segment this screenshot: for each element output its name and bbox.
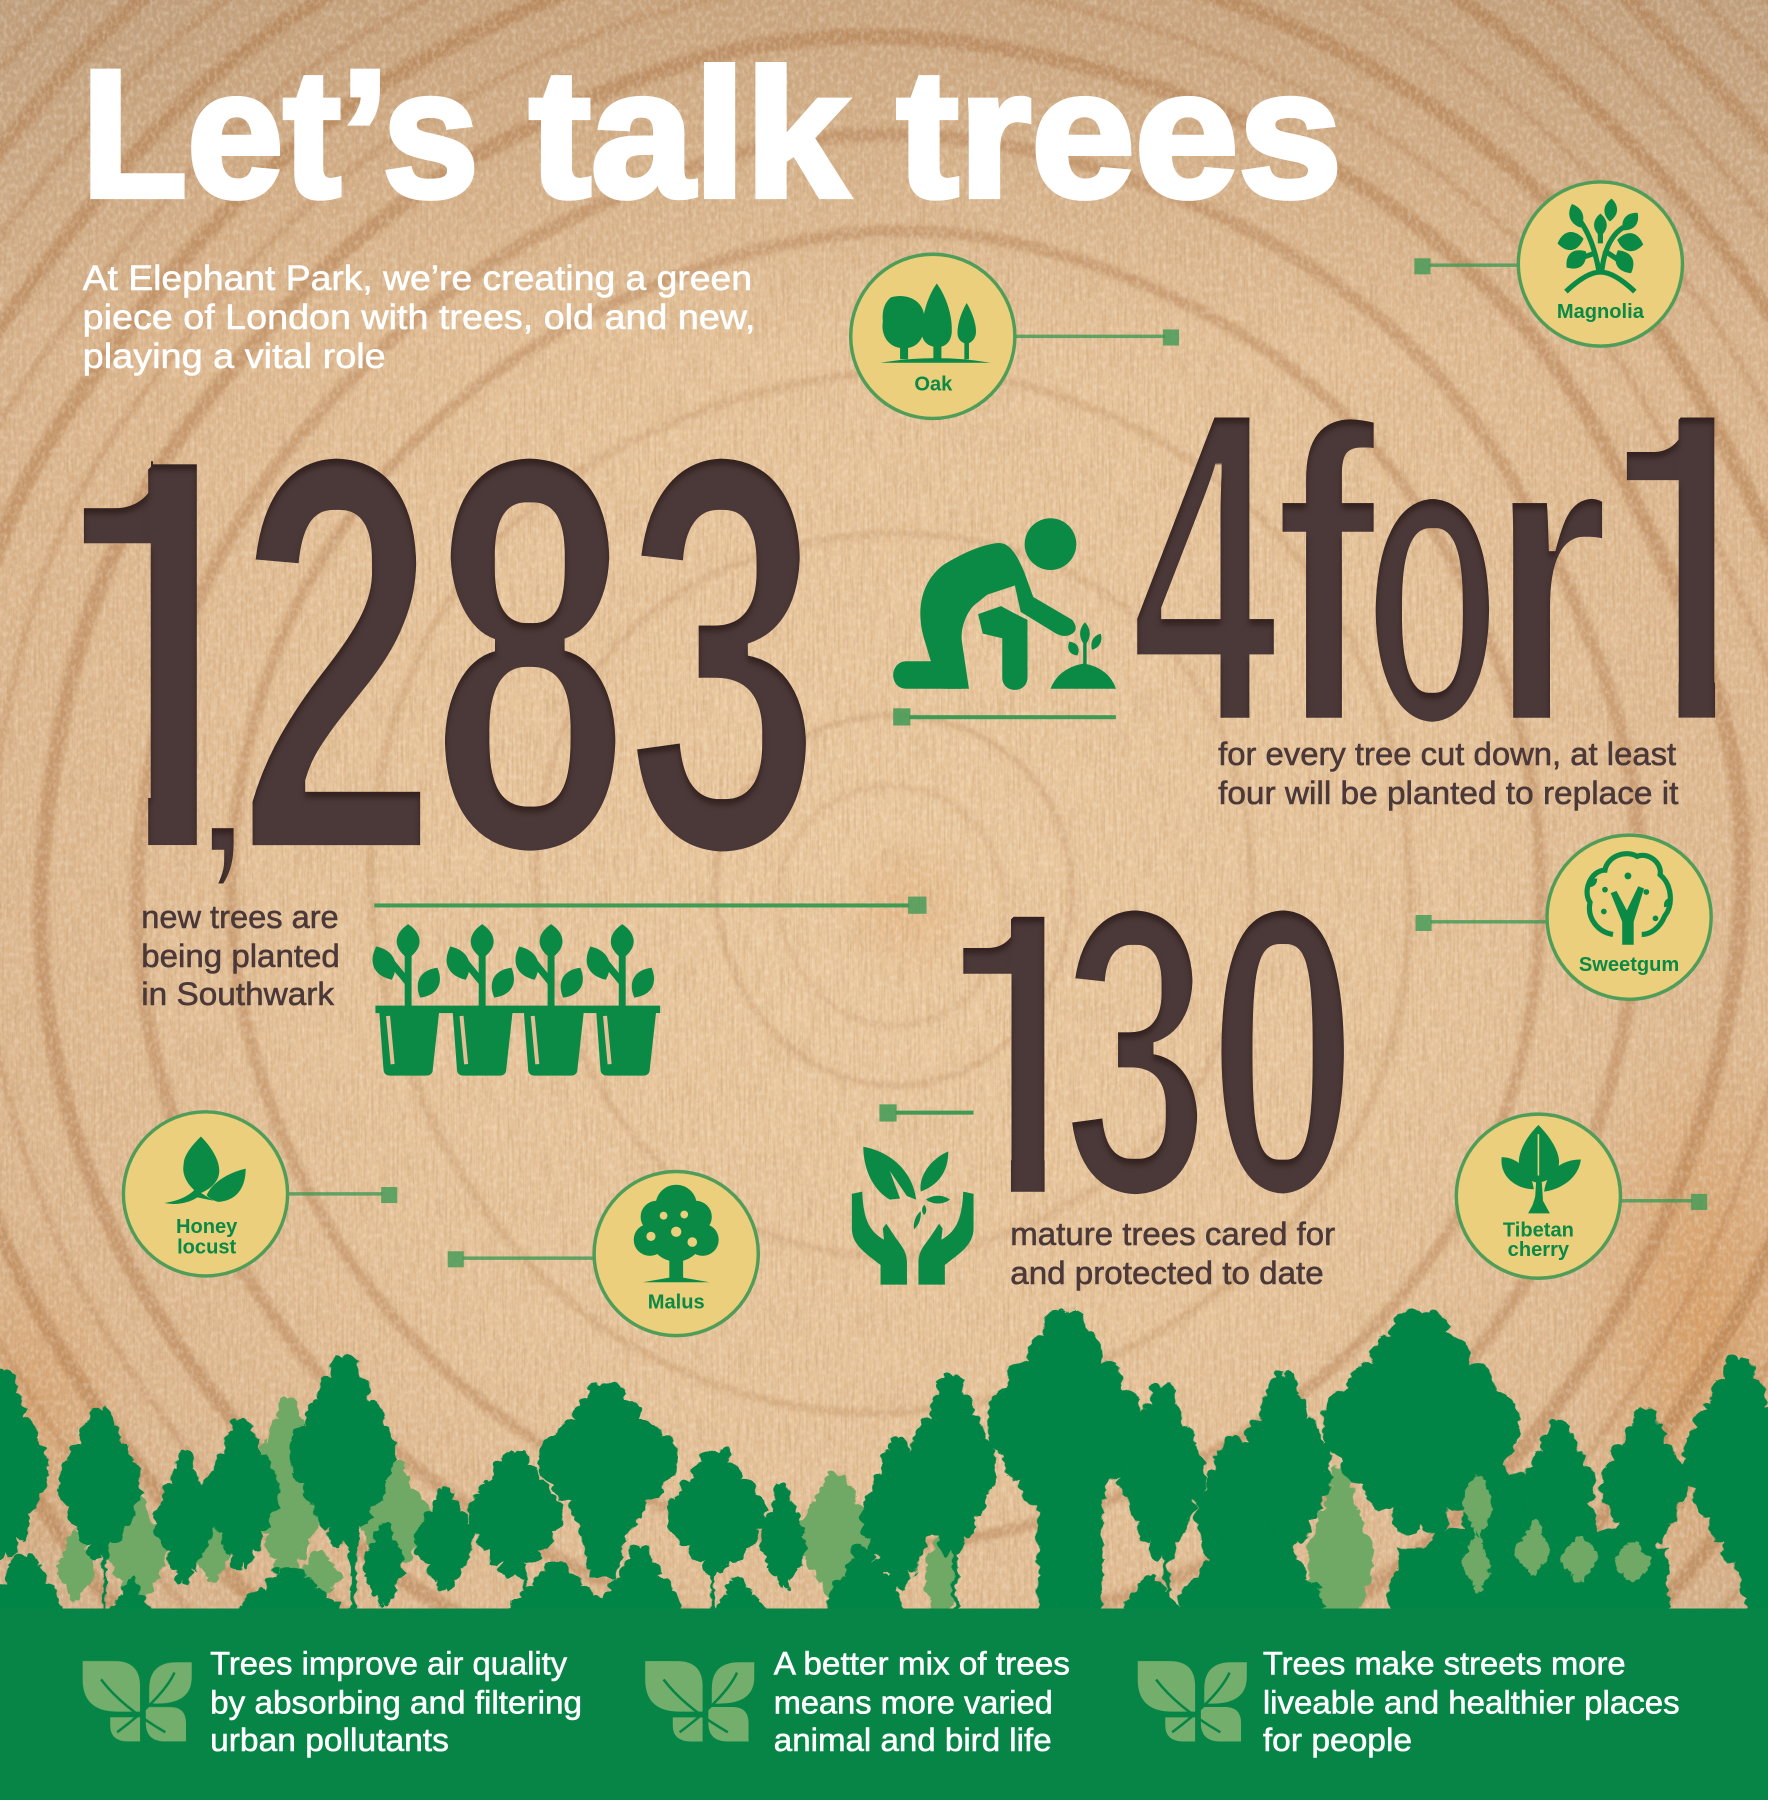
intro text: playing a vital role — [83, 337, 386, 376]
caption: four for one: four will be planted to replace it — [1218, 774, 1678, 811]
fact: air quality: urban pollutants — [210, 1721, 449, 1758]
caption: 130: and protected to date — [1010, 1254, 1324, 1291]
title: Let’s — [82, 33, 479, 235]
big number: 130: 3 — [1062, 819, 1210, 1283]
title — [82, 33, 1342, 235]
big number: 130: 0 — [1208, 820, 1358, 1284]
fact: liveable streets: liveable and healthier places — [1263, 1683, 1680, 1720]
big number: 130 — [963, 910, 1344, 1194]
intro text: piece of London with trees, old and new, — [83, 298, 755, 337]
fact: air quality: Trees improve air quality — [210, 1644, 568, 1681]
species: honey locust: locust — [177, 1237, 237, 1259]
big number: 1,283 — [84, 458, 806, 884]
caption: 130: mature trees cared for — [1010, 1215, 1335, 1252]
intro text — [83, 259, 755, 376]
fact: liveable streets: for people — [1263, 1721, 1412, 1758]
species: oak — [851, 254, 1179, 418]
species: magnolia — [1414, 182, 1682, 346]
species: malus: Malus — [648, 1292, 705, 1314]
fact: animal and bird life: means more varied — [774, 1683, 1053, 1720]
big number: 4 for 1: o — [1364, 338, 1501, 815]
title: trees — [897, 33, 1342, 235]
caption: new trees — [141, 898, 340, 1012]
connector: gardener — [893, 708, 1116, 726]
icon: seedling pots — [366, 924, 660, 1076]
fact: animal and bird life: A better mix of trees — [774, 1644, 1070, 1681]
illustration: pale trees between trunks — [1461, 1472, 1648, 1589]
connector: 130 — [879, 1104, 974, 1122]
big number: 130: 1 — [943, 822, 1100, 1286]
big number: 1,283: 2 — [237, 336, 438, 971]
fact: animal and bird life: animal and bird life — [774, 1721, 1052, 1758]
icon: hands holding leaves — [852, 1147, 974, 1285]
species: honey locust: Honey — [176, 1216, 238, 1238]
icon: gardener planting — [893, 518, 1116, 690]
species: magnolia: Magnolia — [1557, 301, 1645, 323]
big number: 1,283: , — [195, 658, 250, 901]
species: sweetgum: Sweetgum — [1579, 954, 1679, 976]
fact: air quality: by absorbing and filtering — [210, 1683, 582, 1720]
caption: four for one — [1218, 735, 1678, 811]
species: oak: Oak — [914, 373, 953, 395]
title: talk — [529, 33, 850, 235]
fact: animal and bird life — [645, 1644, 1070, 1758]
species: Tibetan cherry: Tibetan — [1503, 1219, 1574, 1241]
big number: 4 for 1: f — [1274, 337, 1379, 814]
illustration: dark tree silhouettes — [0, 1307, 1768, 1702]
caption: four for one: for every tree cut down, at least — [1218, 735, 1676, 772]
species: honey locust — [123, 1112, 397, 1276]
big number: 4 for 1 — [1137, 418, 1716, 722]
big number: 4 for 1: 4 — [1130, 314, 1280, 820]
illustration: pale background trees — [55, 1394, 1370, 1646]
species: malus — [448, 1171, 758, 1336]
species: sweetgum — [1416, 835, 1711, 999]
caption: new trees: new trees are — [141, 898, 339, 935]
big number: 1,283: 1 — [57, 336, 273, 972]
footer band — [0, 1608, 1768, 1800]
species: Tibetan cherry: cherry — [1508, 1239, 1570, 1261]
species: Tibetan cherry — [1456, 1114, 1707, 1278]
fact: liveable streets — [1138, 1644, 1680, 1758]
intro text: At Elephant Park, we’re creating a green — [83, 259, 752, 298]
caption: 130 — [1010, 1215, 1335, 1291]
caption: new trees: in Southwark — [141, 975, 335, 1012]
connector: 1,283 — [374, 897, 926, 914]
big number: 1,283: 3 — [625, 336, 822, 972]
fact: liveable streets: Trees make streets more — [1263, 1644, 1626, 1681]
big number: 4 for 1: r — [1488, 338, 1610, 815]
fact: air quality — [83, 1644, 582, 1758]
big number: 1,283: 8 — [431, 336, 629, 972]
caption: new trees: being planted — [141, 937, 340, 974]
